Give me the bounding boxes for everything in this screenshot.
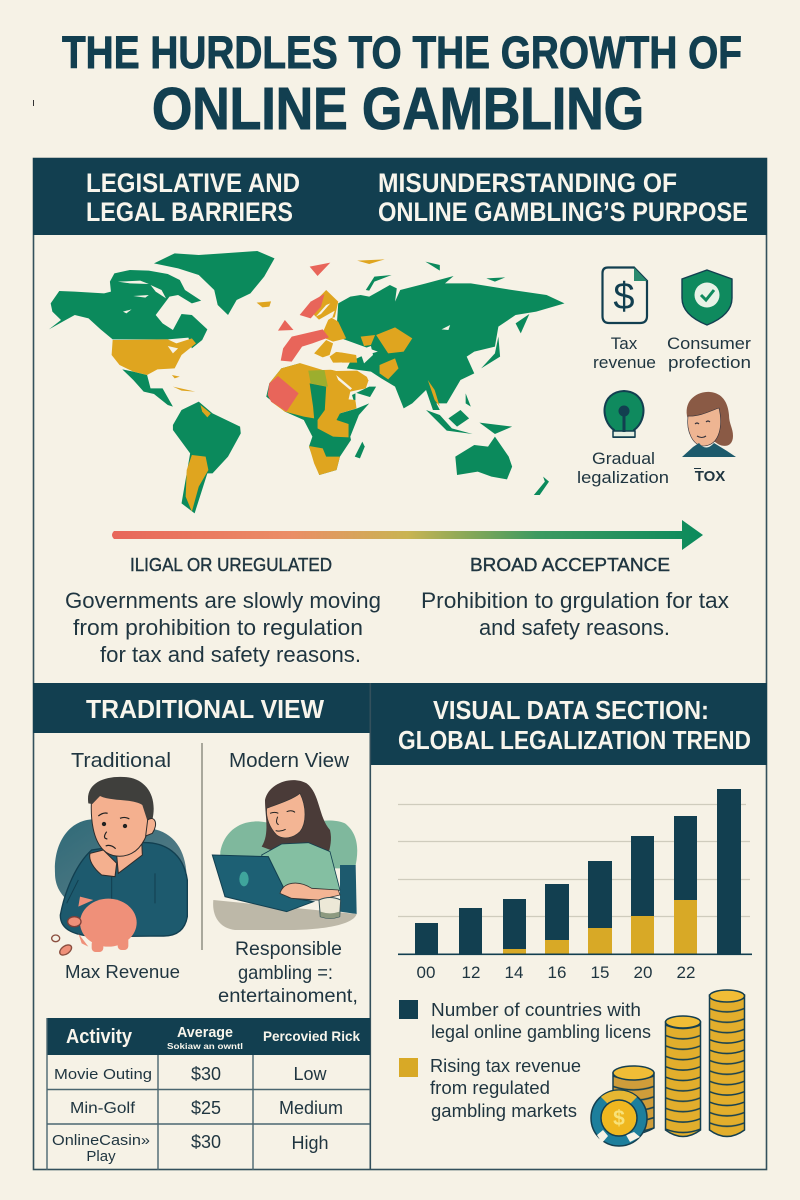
text block: responsible gambling	[218, 938, 358, 1007]
label: acceptance: BROAD ACCEPTANCE	[470, 555, 670, 575]
table row: online casino: $30	[191, 1132, 221, 1152]
consumer protection label: Consumer	[667, 334, 751, 353]
legend: countries: legal online gambling licens	[431, 1022, 651, 1042]
chart axis labels: 22	[677, 963, 695, 982]
gradual legalization label	[577, 449, 669, 487]
table row: golf: Medium	[279, 1098, 343, 1118]
title: ONLINE GAMBLING	[152, 76, 644, 142]
text block: governments: for tax and safety reasons.	[100, 642, 361, 667]
poker chip: $	[613, 1107, 625, 1130]
world map	[49, 251, 564, 514]
table header: Activity	[66, 1026, 133, 1048]
text block: prohibition	[421, 588, 729, 640]
poker chip	[591, 1090, 647, 1146]
icon: woman avatar	[682, 392, 736, 457]
coin stack right	[710, 990, 744, 1136]
illustration: woman with laptop	[212, 780, 357, 930]
header: traditional view	[33, 683, 371, 733]
table row: golf: $25	[191, 1098, 221, 1118]
table header: Percovied Rick	[263, 1028, 360, 1044]
table row: golf	[70, 1098, 343, 1118]
coin stack middle	[666, 1016, 700, 1136]
table row: movie: $30	[191, 1064, 221, 1084]
text block: governments: from prohibition to regulation	[73, 615, 363, 640]
text block: governments	[65, 588, 381, 667]
legend: tax revenue	[399, 1056, 581, 1121]
table row: golf: Min-Golf	[70, 1100, 136, 1117]
header band: top sections: LEGISLATIVE AND	[86, 168, 300, 198]
decorative mark	[33, 100, 34, 106]
icon: tax document: $	[613, 276, 635, 318]
text block: prohibition: and safety reasons.	[479, 615, 670, 640]
text block: responsible gambling: gambling =:	[238, 962, 333, 984]
bar chart: global legalization trend	[398, 789, 752, 982]
icon: tax document	[602, 268, 647, 323]
table row: online casino	[52, 1132, 329, 1165]
outer frame	[34, 158, 766, 1170]
text block: responsible gambling: Responsible	[235, 938, 342, 960]
chart axis labels	[417, 963, 695, 982]
header: traditional view: TRADITIONAL VIEW	[86, 694, 324, 724]
header: visual data	[370, 683, 767, 765]
chart axis labels: 16	[548, 963, 566, 982]
icon: shield	[682, 270, 732, 325]
text block: responsible gambling: entertainoment,	[218, 985, 358, 1007]
table: activity comparison	[47, 1018, 370, 1170]
header band: top sections	[33, 158, 767, 235]
legend: countries	[399, 1000, 651, 1042]
tax revenue label: Tax	[611, 334, 638, 353]
tax revenue label: revenue	[593, 353, 656, 372]
table header: Sokiaw an owntl	[167, 1042, 243, 1051]
legend: tax revenue: gambling markets	[431, 1101, 577, 1121]
icon: coin stacks	[591, 990, 744, 1146]
table row: movie: Low	[293, 1064, 328, 1084]
text block: governments: Governments are slowly moving	[65, 588, 381, 613]
table row: online casino: High	[291, 1133, 329, 1153]
table row: movie: Movie Outing	[54, 1066, 152, 1083]
text block: prohibition: Prohibition to grgulation for tax	[421, 588, 729, 613]
illustration: worried man with piggy bank	[52, 777, 187, 957]
chart axis labels: 14	[505, 963, 523, 982]
icon: gradual legalization bulb	[605, 391, 643, 437]
table row: online casino: Play	[86, 1148, 116, 1165]
gradual legalization label: legalization	[577, 468, 669, 487]
header band: top sections: LEGAL BARRIERS	[86, 197, 293, 227]
table row: movie	[54, 1064, 328, 1084]
coin stack left	[613, 1066, 654, 1134]
label: illegal: ILIGAL OR UREGULATED	[130, 555, 332, 575]
legend: countries: Number of countries with	[431, 1000, 641, 1020]
arrow: legal status gradient	[112, 520, 703, 550]
tax revenue label	[593, 334, 656, 372]
header band: top sections: MISUNDERSTANDING OF	[378, 168, 677, 198]
label: modern view: Modern View	[229, 750, 350, 772]
header: visual data: VISUAL DATA SECTION:	[433, 695, 709, 725]
consumer protection label	[667, 334, 751, 372]
header band: top sections: ONLINE GAMBLING’S PURPOSE	[378, 197, 748, 227]
gradual legalization label: Gradual	[592, 449, 655, 468]
table row: online casino: OnlineCasin»	[52, 1132, 150, 1149]
header: visual data: GLOBAL LEGALIZATION TREND	[398, 725, 751, 755]
chart axis labels: 12	[462, 963, 480, 982]
chart axis labels: 15	[591, 963, 609, 982]
label: traditional: Traditional	[71, 750, 171, 772]
TOX label: TOX	[695, 468, 725, 485]
table header	[47, 1018, 370, 1055]
label: max revenue: Max Revenue	[65, 962, 180, 982]
title	[62, 27, 742, 142]
chart axis labels: 20	[634, 963, 652, 982]
legend: tax revenue: from regulated	[430, 1078, 550, 1098]
legend: tax revenue: Rising tax revenue	[430, 1056, 581, 1076]
consumer protection label: profection	[668, 353, 751, 372]
table header: Average	[177, 1024, 233, 1041]
chart axis labels: 00	[417, 963, 435, 982]
